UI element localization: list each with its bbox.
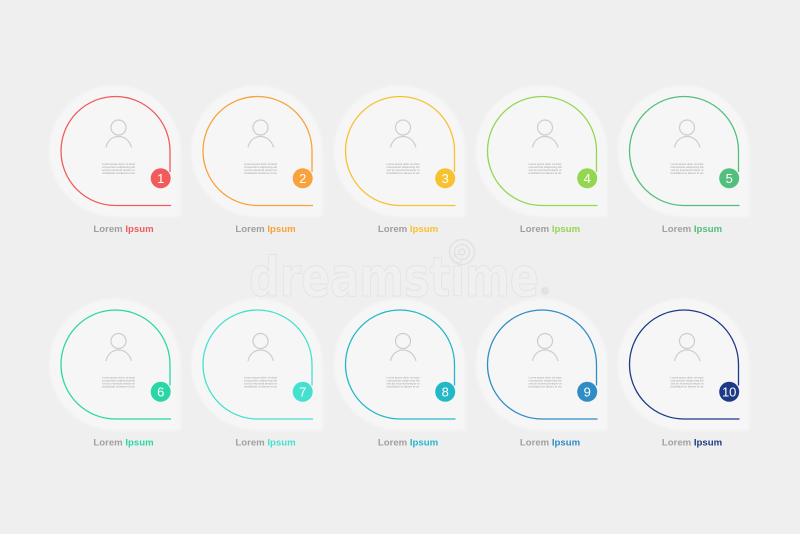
number badge	[719, 382, 739, 402]
card 8	[334, 300, 464, 448]
text block	[528, 376, 562, 388]
text block: consectetur adipiscing elit	[528, 378, 562, 382]
number badge	[293, 382, 313, 402]
text block: incididunt ut labore et do	[102, 171, 135, 175]
label: Lorem Ipsum	[93, 438, 154, 448]
text block	[670, 376, 704, 388]
text block	[102, 162, 135, 175]
card 3	[334, 86, 464, 235]
card 6	[50, 300, 180, 448]
text block: incididunt ut labore et do	[528, 171, 562, 175]
text block: sed do eiusmod tempor in	[670, 382, 704, 386]
text block: consectetur adipiscing elit	[102, 165, 135, 169]
text block	[102, 376, 135, 388]
text block	[244, 376, 277, 388]
icon: person	[674, 120, 700, 148]
card 2	[192, 86, 322, 235]
text block	[386, 162, 420, 175]
number badge: 7	[299, 384, 306, 400]
card 4	[476, 86, 606, 235]
text block: consectetur adipiscing elit	[670, 165, 704, 169]
text block: incididunt ut labore et do	[386, 384, 420, 388]
text block: sed do eiusmod tempor in	[386, 382, 420, 386]
card 5	[618, 86, 748, 235]
text block: sed do eiusmod tempor in	[386, 168, 420, 172]
card 1	[50, 86, 180, 235]
label: Lorem Ipsum	[520, 438, 580, 448]
number badge	[719, 168, 739, 188]
text block: Lorem ipsum dolor sit amet	[670, 162, 704, 166]
text block: Lorem ipsum dolor sit amet	[244, 376, 277, 380]
text block: consectetur adipiscing elit	[386, 165, 420, 169]
text block: incididunt ut labore et do	[386, 171, 420, 175]
text block	[244, 162, 277, 175]
icon: person	[390, 334, 416, 361]
number badge: 3	[442, 171, 449, 186]
text block: consectetur adipiscing elit	[244, 378, 277, 382]
label: Lorem Ipsum	[378, 224, 438, 235]
text block: incididunt ut labore et do	[528, 384, 562, 388]
text block	[670, 162, 704, 175]
text block: Lorem ipsum dolor sit amet	[386, 162, 420, 166]
text block: incididunt ut labore et do	[244, 171, 277, 175]
number badge	[293, 168, 313, 188]
number badge	[435, 382, 455, 402]
text block: consectetur adipiscing elit	[670, 378, 704, 382]
text block: consectetur adipiscing elit	[244, 165, 277, 169]
watermark: dreamstime	[249, 246, 539, 309]
number badge: 10	[722, 384, 736, 400]
number badge: 6	[157, 384, 164, 400]
icon: person	[106, 120, 132, 148]
text block: sed do eiusmod tempor in	[244, 382, 277, 386]
text block: consectetur adipiscing elit	[528, 165, 562, 169]
text block: sed do eiusmod tempor in	[244, 168, 277, 172]
text block: sed do eiusmod tempor in	[528, 382, 562, 386]
number badge: 8	[442, 384, 449, 400]
number badge	[151, 382, 171, 402]
label: Lorem Ipsum	[662, 224, 722, 235]
text block: Lorem ipsum dolor sit amet	[670, 376, 704, 380]
card 9	[476, 300, 606, 448]
text block: Lorem ipsum dolor sit amet	[528, 162, 562, 166]
text block: Lorem ipsum dolor sit amet	[244, 162, 277, 166]
text block: sed do eiusmod tempor in	[102, 168, 135, 172]
label: Lorem Ipsum	[378, 438, 438, 448]
card 7	[192, 300, 322, 448]
number badge	[151, 168, 171, 188]
number badge: 1	[157, 171, 164, 186]
icon: person	[390, 120, 416, 148]
label: Lorem Ipsum	[662, 438, 722, 448]
number badge: 4	[584, 171, 591, 186]
number badge: 9	[584, 384, 591, 400]
text block: sed do eiusmod tempor in	[102, 382, 135, 386]
label: Lorem Ipsum	[235, 224, 296, 235]
text block: incididunt ut labore et do	[670, 171, 704, 175]
icon: person	[532, 334, 558, 361]
text block	[386, 376, 420, 388]
label: Lorem Ipsum	[520, 224, 580, 235]
card 10	[618, 300, 748, 448]
text block: Lorem ipsum dolor sit amet	[102, 376, 135, 380]
number badge: 5	[726, 171, 733, 186]
icon: person	[248, 334, 274, 361]
text block: incididunt ut labore et do	[102, 384, 135, 388]
icon: person	[106, 334, 132, 361]
number badge	[577, 168, 597, 188]
text block: incididunt ut labore et do	[244, 384, 277, 388]
number badge: 2	[299, 171, 306, 186]
number badge	[435, 168, 455, 188]
text block: consectetur adipiscing elit	[102, 378, 135, 382]
icon: person	[674, 334, 700, 361]
text block: sed do eiusmod tempor in	[528, 168, 562, 172]
icon: person	[532, 120, 558, 148]
text block: sed do eiusmod tempor in	[670, 168, 704, 172]
text block: incididunt ut labore et do	[670, 384, 704, 388]
text block	[528, 162, 562, 175]
icon: person	[248, 120, 274, 148]
text block: consectetur adipiscing elit	[386, 378, 420, 382]
text block: Lorem ipsum dolor sit amet	[386, 376, 420, 380]
number badge	[577, 382, 597, 402]
text block: Lorem ipsum dolor sit amet	[102, 162, 135, 166]
label: Lorem Ipsum	[93, 224, 154, 235]
label: Lorem Ipsum	[235, 438, 296, 448]
text block: Lorem ipsum dolor sit amet	[528, 376, 562, 380]
